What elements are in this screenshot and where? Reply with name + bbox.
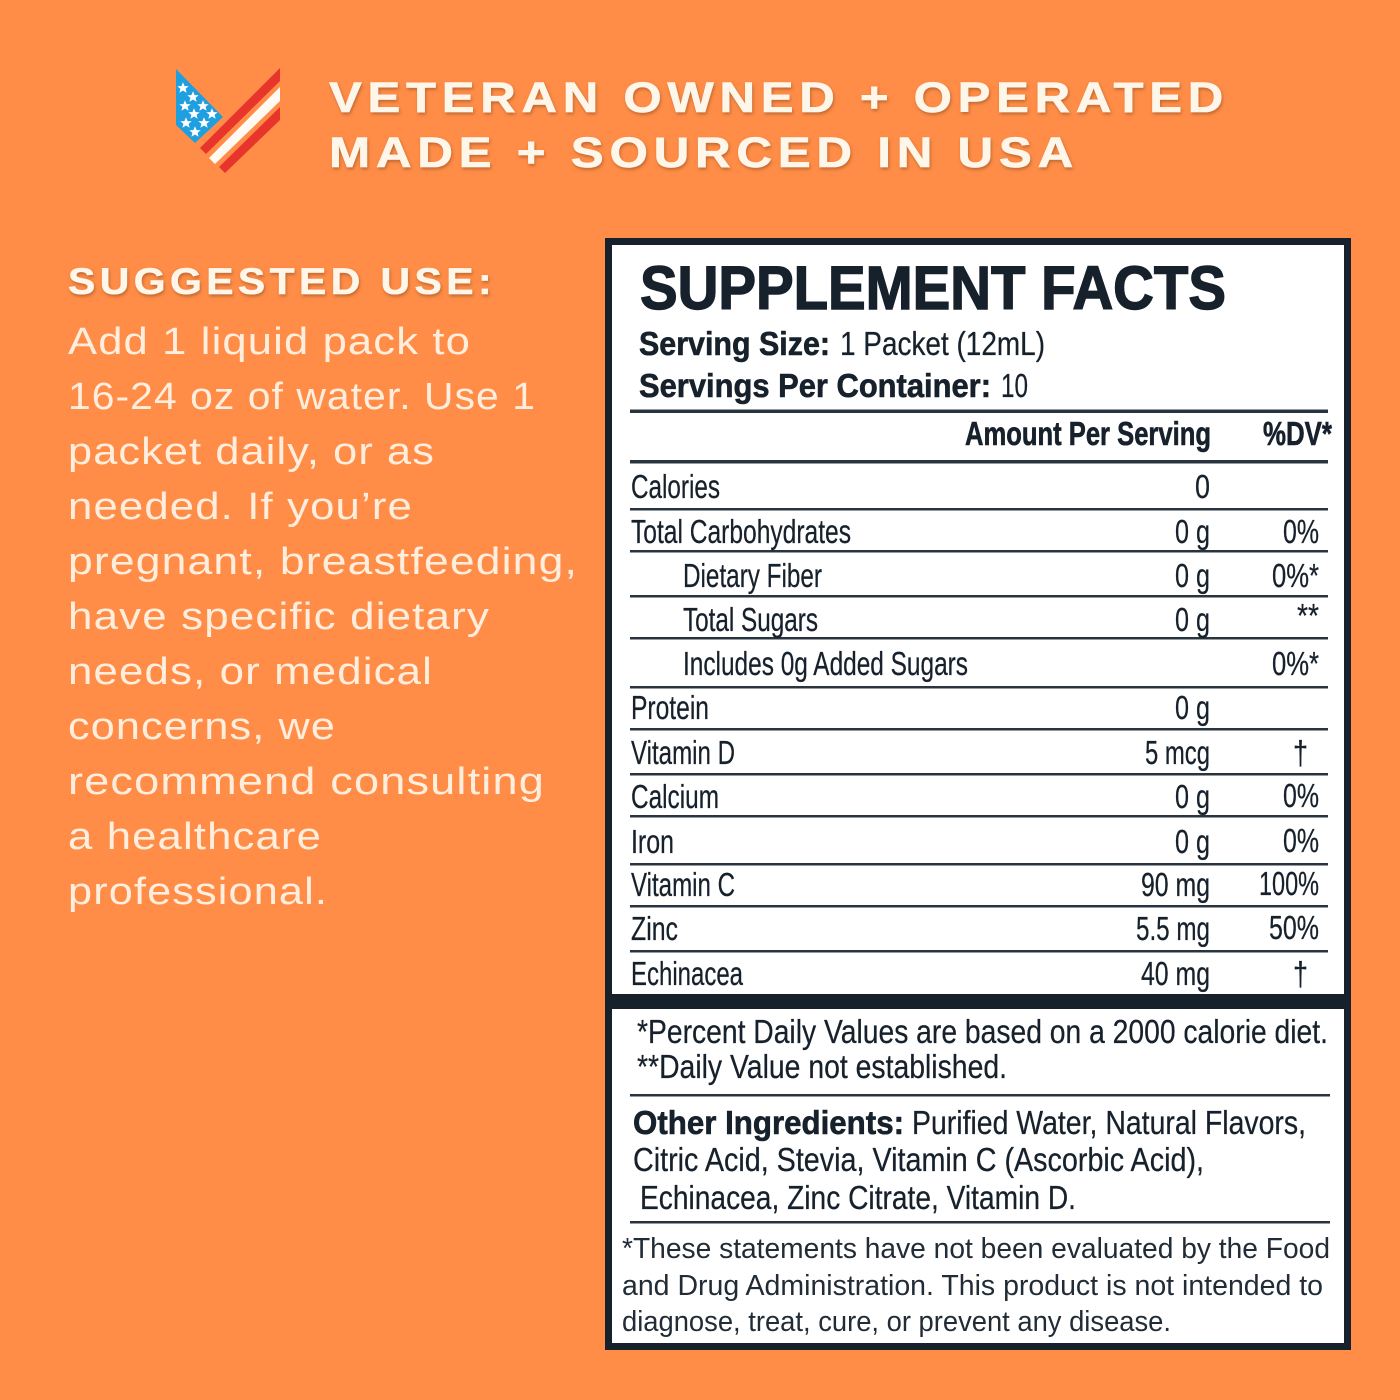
text block: other ingredients: Echinacea, Zinc Citrate, Vitamin D. [640, 1179, 1076, 1216]
row: dietary fiber: 0%* [1272, 557, 1319, 594]
row: calcium: 0% [1283, 777, 1319, 814]
row: added sugars [683, 645, 1319, 682]
row: vitamin c: 100% [1259, 865, 1319, 902]
text block: fda disclaimer [622, 1233, 1330, 1338]
text block: directions: 16-24 oz of water. Use 1 [68, 376, 536, 418]
row: dietary fiber: 0 g [1175, 557, 1210, 594]
text block: directions: professional. [68, 871, 328, 913]
text block: directions: Add 1 liquid pack to [68, 321, 471, 363]
row: iron: 0 g [1175, 823, 1210, 860]
icon: american flag check mark [176, 68, 280, 173]
row: total sugars: 0 g [1175, 601, 1210, 638]
text block: serving information [639, 325, 1045, 404]
heading: suggested use: SUGGESTED USE: [68, 261, 496, 302]
row: iron: 0% [1283, 822, 1319, 859]
row: zinc: 50% [1269, 909, 1319, 946]
text block: other ingredients [633, 1104, 1306, 1216]
row: vitamin d: † [1293, 734, 1308, 771]
text block: fda disclaimer: diagnose, treat, cure, or prevent any disease. [622, 1306, 1171, 1338]
text block: fda disclaimer: *These statements have not been evaluated by the Food [622, 1233, 1330, 1265]
heading: veteran owned: VETERAN OWNED + OPERATED [329, 74, 1229, 122]
row: vitamin d [631, 734, 1308, 771]
row: protein: 0 g [1175, 689, 1210, 726]
panel: suggested use [68, 261, 578, 913]
text block: directions: recommend consulting [68, 761, 545, 803]
text block: other ingredients: Purified Water, Natural Flavors, [912, 1104, 1306, 1141]
row: iron [631, 822, 1319, 860]
row: total carbohydrates: Total Carbohydrates [631, 513, 851, 550]
text block: directions: pregnant, breastfeeding, [68, 541, 578, 583]
text block: directions: concerns, we [68, 706, 336, 748]
row: total sugars [683, 597, 1319, 638]
row: calcium: Calcium [631, 778, 719, 815]
text block: directions: needs, or medical [68, 651, 433, 693]
row: total carbohydrates: 0 g [1175, 513, 1210, 550]
title: supplement facts: SUPPLEMENT FACTS [640, 254, 1226, 322]
row: added sugars: 0%* [1272, 645, 1319, 682]
row: calories: 0 [1195, 468, 1210, 505]
row: echinacea: Echinacea [631, 955, 743, 992]
text block: serving information: Servings Per Container: [639, 367, 991, 404]
panel: supplement facts label [605, 238, 1351, 1350]
row: zinc [631, 909, 1319, 947]
row: total carbohydrates [631, 513, 1319, 550]
heading: veteran owned: MADE + SOURCED IN USA [329, 129, 1079, 177]
text block: directions: a healthcare [68, 816, 322, 858]
row: vitamin d: 5 mcg [1145, 734, 1210, 771]
row: zinc: 5.5 mg [1136, 910, 1210, 947]
row: calcium [631, 777, 1319, 815]
text block: directions: needed. If you’re [68, 486, 413, 528]
row: calories [631, 468, 1210, 505]
row: echinacea: † [1293, 955, 1308, 992]
row: vitamin c: 90 mg [1141, 866, 1210, 903]
text block: serving information: 10 [1001, 367, 1028, 404]
text block: daily value notes [637, 1013, 1328, 1085]
row: calories: Calories [631, 468, 720, 505]
row: vitamin c: Vitamin C [631, 866, 735, 903]
row: protein [631, 689, 1210, 726]
row: total carbohydrates: 0% [1283, 513, 1319, 550]
row: vitamin d: Vitamin D [631, 734, 735, 771]
heading: veteran owned [329, 74, 1229, 177]
row: echinacea: 40 mg [1141, 955, 1210, 992]
row: total sugars: Total Sugars [683, 601, 818, 638]
row: total sugars: ** [1297, 597, 1319, 634]
table header: %DV* [1263, 415, 1332, 452]
text block: other ingredients: Citric Acid, Stevia, Vitamin C (Ascorbic Acid), [633, 1141, 1204, 1178]
text block: daily value notes: **Daily Value not established. [637, 1048, 1007, 1085]
text block: serving information: Serving Size: [639, 325, 830, 362]
row: vitamin c [631, 865, 1319, 903]
row: dietary fiber [683, 557, 1319, 594]
table header: Amount Per Serving [965, 415, 1211, 452]
text block: other ingredients: Other Ingredients: [633, 1104, 904, 1141]
text block: fda disclaimer: and Drug Administration. This product is not intended to [622, 1270, 1323, 1302]
row: zinc: Zinc [631, 910, 678, 947]
row: echinacea [631, 955, 1308, 992]
row: calcium: 0 g [1175, 778, 1210, 815]
row: dietary fiber: Dietary Fiber [683, 557, 822, 594]
text block: directions: have specific dietary [68, 596, 490, 638]
text block: directions: packet daily, or as [68, 431, 435, 473]
text block: directions [68, 321, 578, 913]
row: added sugars: Includes 0g Added Sugars [683, 645, 968, 682]
text block: serving information: 1 Packet (12mL) [840, 325, 1045, 362]
row: protein: Protein [631, 689, 709, 726]
row: iron: Iron [631, 823, 674, 860]
